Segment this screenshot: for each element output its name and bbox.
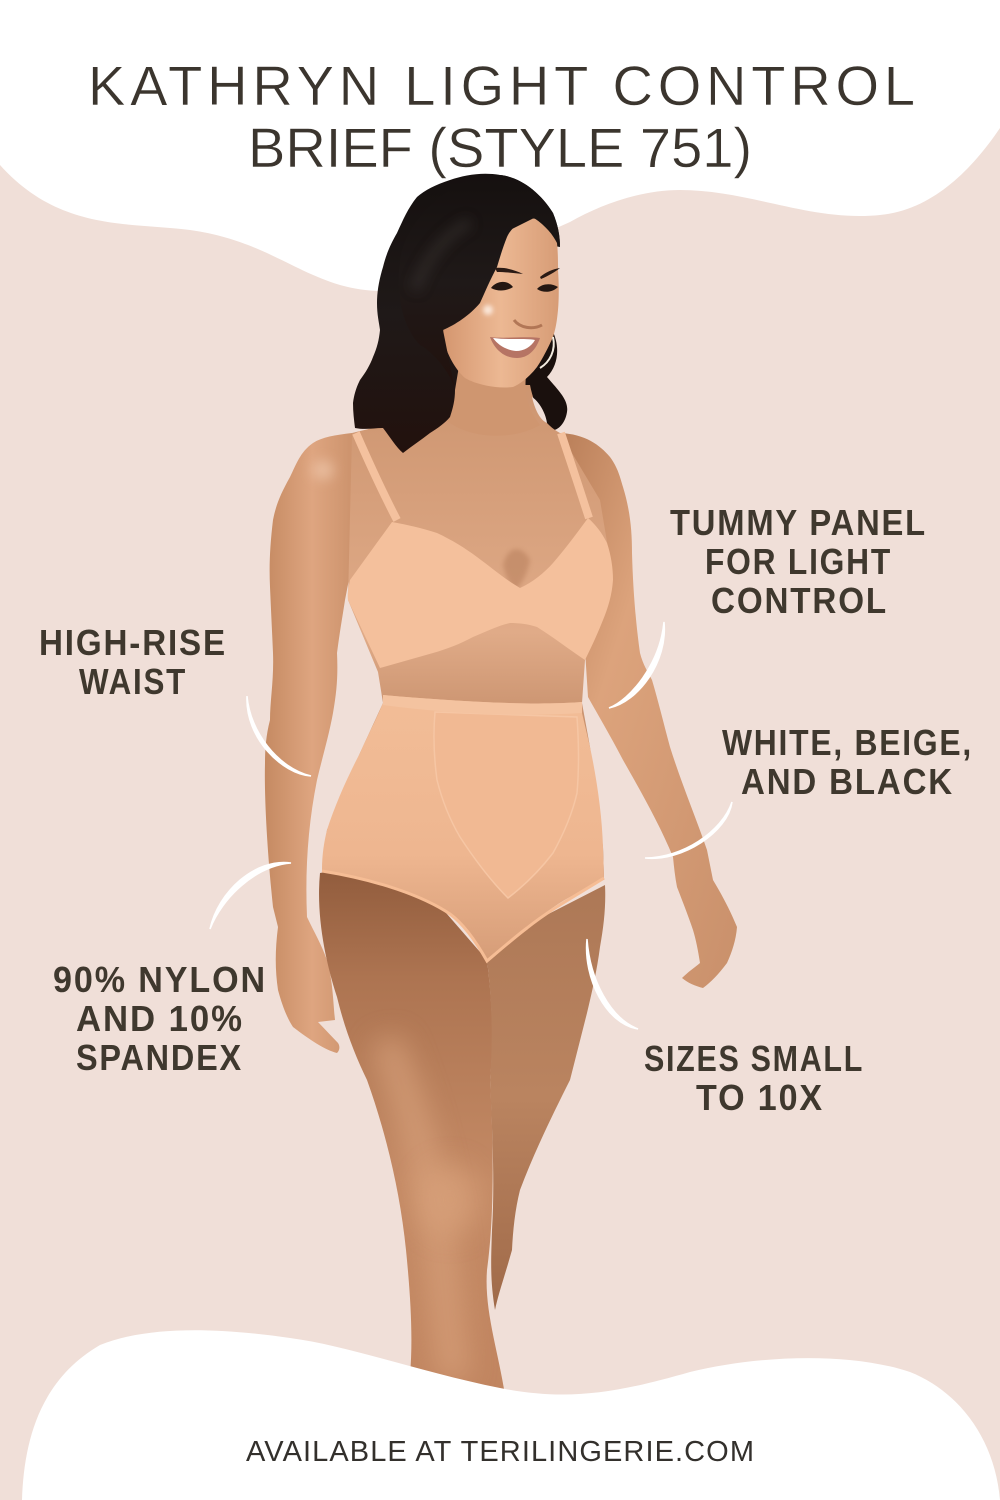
arrow: colours <box>645 802 732 858</box>
bra straps <box>356 433 589 520</box>
shoulder highlight <box>312 460 334 480</box>
arrow: high-rise waist <box>247 696 311 776</box>
callout: sizes: TO 10X <box>696 1077 824 1118</box>
callout: high-rise waist <box>39 622 227 702</box>
left arm <box>265 433 370 1053</box>
nose <box>514 320 542 328</box>
bottom white wave <box>22 1330 1000 1500</box>
waistband <box>383 695 582 715</box>
cleavage shading <box>503 549 530 590</box>
hair back left <box>353 174 560 453</box>
leg opening trim <box>322 871 604 961</box>
callout: tummy panel: TUMMY PANEL <box>670 502 927 543</box>
hair gloss <box>415 222 470 290</box>
callout: fabric: AND 10% <box>76 998 244 1039</box>
top white wave <box>0 0 1000 291</box>
hair back right <box>500 330 567 430</box>
callout: fabric: SPANDEX <box>76 1037 243 1078</box>
hair right gap <box>532 397 547 423</box>
left leg <box>319 860 505 1395</box>
callout: high-rise waist: WAIST <box>79 661 187 702</box>
callout: sizes: SIZES SMALL <box>644 1038 864 1079</box>
neck <box>446 345 540 436</box>
callout: fabric <box>53 959 267 1078</box>
arrow: sizes <box>587 939 638 1029</box>
callout: tummy panel <box>670 502 927 621</box>
arrow: fabric <box>210 863 291 929</box>
callout: fabric: 90% NYLON <box>53 959 267 1000</box>
callout: sizes <box>644 1038 864 1118</box>
eyes and brows <box>491 268 560 292</box>
torso <box>322 385 610 880</box>
title: BRIEF (STYLE 751) <box>248 116 752 179</box>
title: KATHRYN LIGHT CONTROL <box>88 54 915 117</box>
callout: colours <box>722 722 973 802</box>
arrow: tummy panel <box>609 622 664 708</box>
callout: tummy panel: FOR LIGHT <box>705 541 892 582</box>
figure: woman wearing the brief <box>265 174 737 1395</box>
title <box>88 54 915 179</box>
callout: colours: AND BLACK <box>741 761 954 802</box>
face <box>443 218 559 387</box>
earring <box>540 337 554 368</box>
tummy panel <box>434 712 578 898</box>
callout: colours: WHITE, BEIGE, <box>722 722 973 763</box>
footer text: AVAILABLE AT TERILINGERIE.COM <box>246 1436 754 1468</box>
right leg <box>487 885 605 1310</box>
left leg highlight <box>385 1040 480 1380</box>
callout: high-rise waist: HIGH-RISE <box>39 622 227 663</box>
cheek highlight <box>483 305 493 315</box>
hair front <box>399 175 560 390</box>
brief <box>322 695 604 960</box>
smile <box>490 337 540 358</box>
bra <box>348 518 613 668</box>
callout: tummy panel: CONTROL <box>711 580 888 621</box>
right arm <box>560 433 737 988</box>
